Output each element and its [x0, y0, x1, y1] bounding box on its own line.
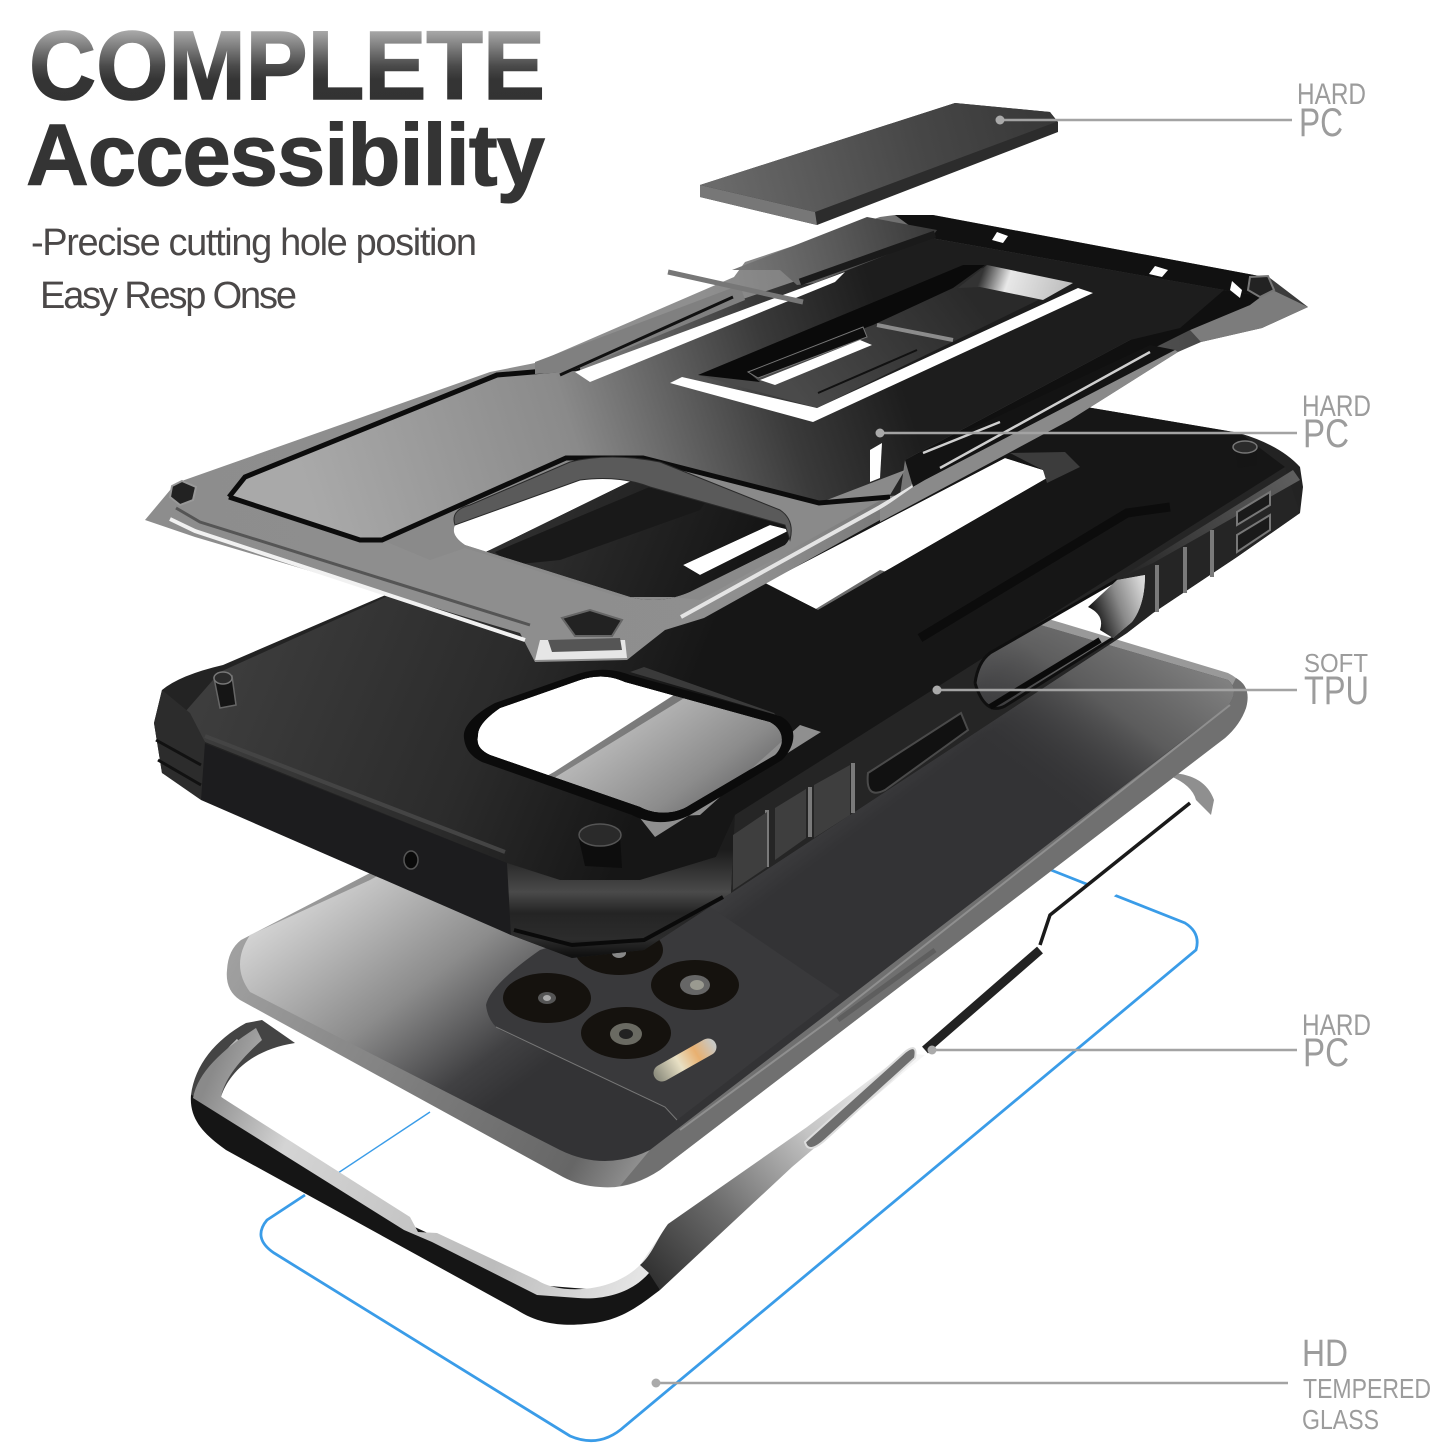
phone: rim — [227, 570, 1247, 1187]
plate: black top rim — [895, 215, 1270, 296]
plate: recess line — [229, 368, 890, 540]
case: corner black groove — [514, 897, 723, 945]
phone: back face — [240, 578, 1234, 1161]
camera lens: bottom — [581, 1007, 671, 1059]
callout: hard pc frame — [928, 1009, 1371, 1075]
callout: hard pc plate: PC — [1303, 412, 1349, 456]
plate: silver right corner — [1190, 285, 1308, 342]
plate: hinge pin — [668, 272, 803, 302]
case: front wall — [201, 742, 511, 935]
plate: white pill — [870, 443, 882, 482]
camera flash — [662, 1047, 708, 1073]
case: interior back — [185, 340, 1285, 880]
plate: dark right side — [905, 290, 1262, 470]
callout: hd tempered glass — [652, 1333, 1431, 1435]
case: wall ridge — [205, 736, 505, 852]
case: right bracket — [1237, 492, 1270, 552]
case: oval chrome wedge — [1088, 575, 1145, 638]
phone — [227, 570, 1248, 1187]
plate: lower right rim stripe — [681, 472, 918, 617]
subtitle text: -Precise cutting hole position — [31, 222, 477, 264]
plate: hinge block — [732, 217, 937, 285]
subtitle text: Easy Resp Onse — [40, 275, 297, 317]
case: oval ring — [975, 580, 1117, 708]
plate: silhouette — [145, 215, 1308, 662]
case: left corner block — [154, 690, 205, 800]
case: camera hole wedge — [640, 725, 821, 837]
plate: corner nut right — [1248, 276, 1274, 297]
callout: hard pc frame: HARD — [1302, 1009, 1371, 1042]
case: side wall — [731, 467, 1300, 893]
camera lens: top — [575, 925, 663, 975]
case: side bevel — [1120, 470, 1300, 578]
case: silhouette — [154, 340, 1303, 958]
callout: soft tpu: TPU — [1304, 669, 1369, 713]
plate: groove arm — [880, 345, 1178, 522]
camera lens: right — [651, 960, 739, 1010]
callout: hd tempered glass: HD — [1302, 1333, 1348, 1375]
recess: floor — [698, 265, 1073, 408]
phone: camera module — [486, 900, 840, 1120]
soft tpu case — [154, 340, 1303, 958]
case: oval slit — [990, 640, 1100, 707]
phone: top right glow — [800, 578, 1234, 880]
title — [26, 11, 545, 204]
plate: lower left dark stripe — [176, 508, 530, 625]
plate: lower left rim stripe — [170, 519, 525, 640]
recess: black bar — [748, 327, 867, 378]
case: ribs — [767, 530, 1212, 867]
plate: top left strip — [535, 272, 845, 382]
case: screw left — [214, 672, 236, 708]
case: slot bevel — [1010, 452, 1080, 483]
plate: corner nut bottom — [535, 610, 627, 660]
case: charging port — [404, 851, 418, 869]
callout: hd tempered glass: GLASS — [1302, 1404, 1379, 1435]
hard pc bumper frame — [191, 773, 1214, 1325]
case: rib panels — [733, 765, 850, 890]
callout: hard pc plate — [876, 390, 1371, 456]
title: COMPLETE — [29, 11, 545, 120]
recess: gray bar — [877, 325, 953, 340]
callout: hard pc frame: PC — [1303, 1031, 1349, 1075]
case: button slot — [868, 713, 968, 793]
case: camera hole facets — [630, 667, 790, 730]
callout: hard pc kickstand: PC — [1299, 101, 1343, 145]
frame: left stub — [191, 1020, 295, 1097]
tempered glass outline — [261, 870, 1197, 1441]
plate: corner nut left — [170, 481, 196, 505]
frame: right body — [640, 1053, 925, 1290]
plate: camera hole rim — [454, 457, 791, 540]
frame: black outer band — [191, 1095, 660, 1325]
recess: thin slit — [818, 350, 917, 393]
case: bottom corner — [507, 815, 735, 958]
case: strip seen through plate — [495, 470, 720, 565]
kickstand plate — [700, 103, 1058, 225]
frame: button cut-out — [805, 1048, 916, 1148]
case: camera hole ring — [464, 670, 793, 822]
case: screw right — [1233, 441, 1257, 468]
plate: lower face — [382, 458, 905, 600]
case: inner groove — [920, 507, 1170, 638]
callout: hard pc kickstand: HARD — [1297, 78, 1366, 111]
callout: hard pc plate: HARD — [1302, 390, 1371, 423]
frame: stub inner highlight — [208, 1040, 238, 1090]
recess: white slot — [760, 340, 872, 385]
recess: white band — [670, 288, 1093, 422]
recess: silver top wall — [958, 265, 1073, 300]
plate: kickstand recess — [670, 265, 1093, 422]
case: screw bottom — [578, 824, 622, 868]
title: Accessibility — [26, 107, 545, 204]
plate: main face — [229, 237, 1224, 540]
phone: side buttons — [838, 950, 935, 1020]
callout: hard pc kickstand — [996, 78, 1366, 145]
callout: soft tpu: SOFT — [1304, 648, 1368, 678]
phone: module edge — [496, 1027, 677, 1120]
plate: white notches — [992, 232, 1242, 298]
callout: soft tpu — [932, 648, 1369, 713]
case: left corner band — [156, 740, 201, 785]
frame: upper rail — [925, 773, 1214, 1055]
camera lens: left — [503, 973, 591, 1023]
subtitle text — [31, 222, 477, 317]
plate: hinge stem — [800, 234, 935, 282]
recess: black inner wall — [698, 265, 985, 382]
top hard pc plate — [145, 215, 1308, 662]
phone: right rim shade — [620, 678, 1248, 1186]
frame: chrome inner band — [193, 1028, 668, 1298]
phone: edge groove — [680, 705, 1230, 1130]
